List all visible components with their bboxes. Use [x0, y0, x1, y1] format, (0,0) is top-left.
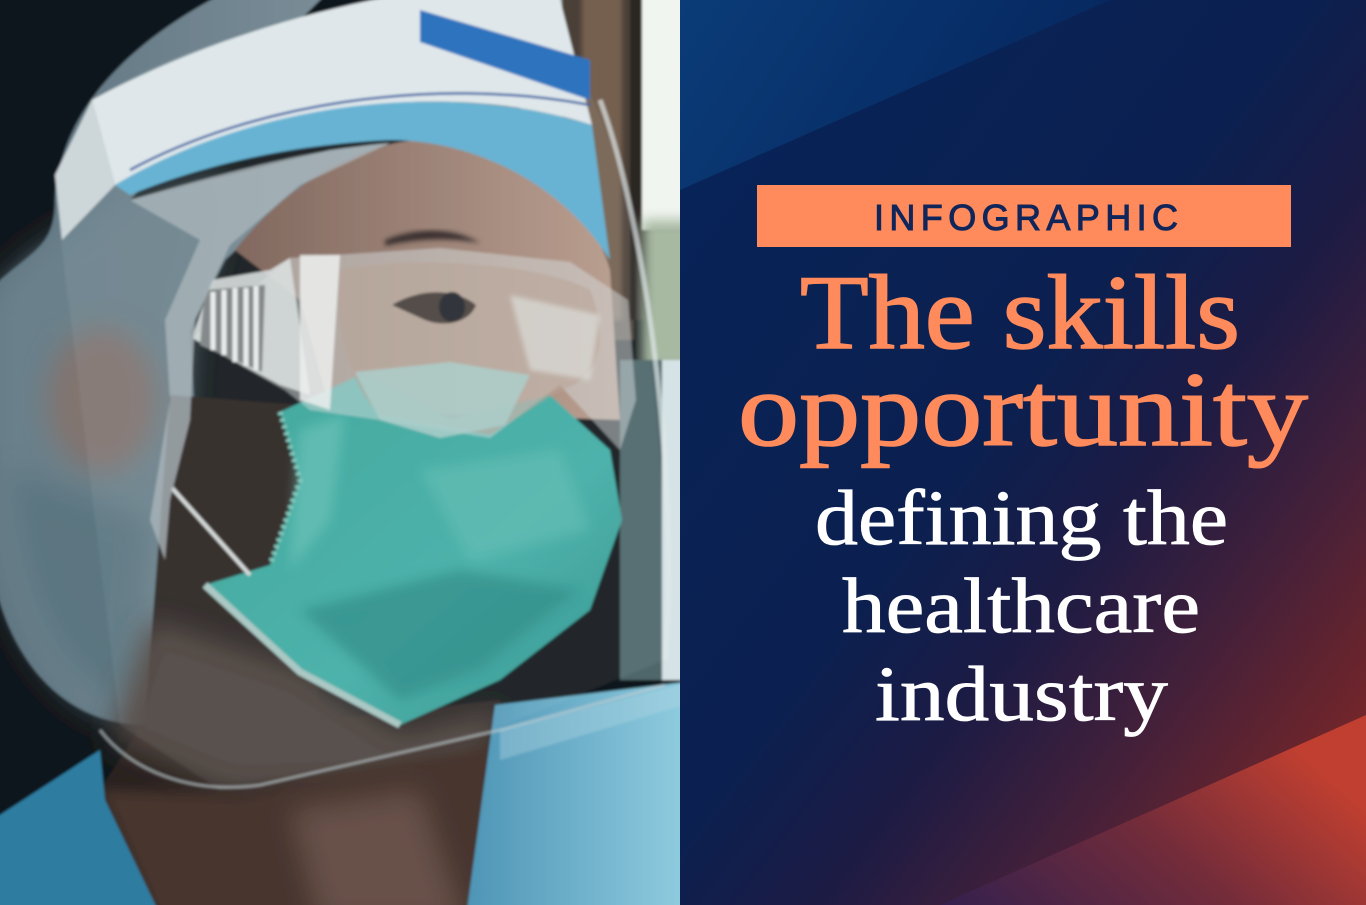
top diagonal band	[680, 0, 1110, 190]
eyebrow	[385, 231, 480, 246]
neck and face shadow	[100, 140, 620, 905]
heading: white title lines: healthcare	[842, 562, 1200, 649]
scrub top	[0, 750, 165, 905]
ear under hair cover	[47, 328, 157, 472]
bottom diagonal band	[940, 715, 1366, 905]
heading: white title lines	[815, 474, 1228, 737]
heading: orange title lines: opportunity	[738, 351, 1308, 468]
hair cover	[0, 0, 390, 725]
label banner: INFOGRAPHIC	[757, 185, 1291, 247]
heading: orange title lines: The skills	[800, 254, 1240, 371]
eye	[392, 292, 476, 324]
heading: white title lines: industry	[875, 650, 1168, 737]
face shield	[55, 0, 700, 790]
heading: orange title lines	[738, 254, 1308, 468]
title	[738, 254, 1308, 737]
face	[235, 140, 620, 420]
window and frame background	[520, 0, 680, 683]
heading: white title lines: defining the	[815, 474, 1228, 561]
label banner: INFOGRAPHIC: INFOGRAPHIC	[874, 197, 1178, 238]
goggles	[192, 248, 636, 450]
surgical mask	[205, 375, 622, 725]
hair cover elastic frill	[130, 143, 390, 560]
mask ear loop	[172, 488, 250, 575]
mask fold under goggles	[355, 362, 530, 438]
photo: healthcare worker in protective equipment	[0, 0, 710, 905]
panel: title background	[680, 0, 1366, 905]
